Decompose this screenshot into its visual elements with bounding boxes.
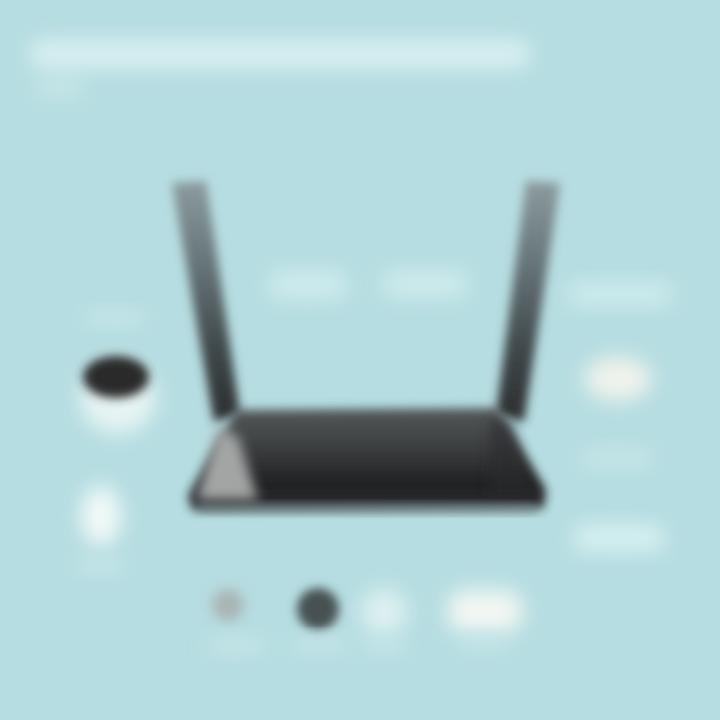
right middle label <box>582 448 652 468</box>
feature left lower: white icon <box>78 486 124 574</box>
left top label <box>86 310 144 326</box>
icon: white port <box>448 590 522 632</box>
title <box>30 40 530 96</box>
bottom icon row <box>210 588 522 654</box>
icon: grey port <box>212 589 244 621</box>
right lower label <box>574 524 664 552</box>
top center labels <box>270 270 467 300</box>
router right shading <box>490 420 535 495</box>
feature left: dark round icon <box>80 356 156 434</box>
icon: left antenna <box>172 181 240 422</box>
router base shadow <box>198 504 538 513</box>
right top label <box>568 282 672 306</box>
router <box>172 181 560 513</box>
feature right: oval icon <box>584 357 652 401</box>
icon: dark port <box>297 588 339 630</box>
router body <box>188 408 546 510</box>
icon: right antenna <box>496 181 560 422</box>
bottom captions <box>210 636 508 654</box>
icon: light port <box>360 588 408 636</box>
router left highlight <box>196 428 258 500</box>
